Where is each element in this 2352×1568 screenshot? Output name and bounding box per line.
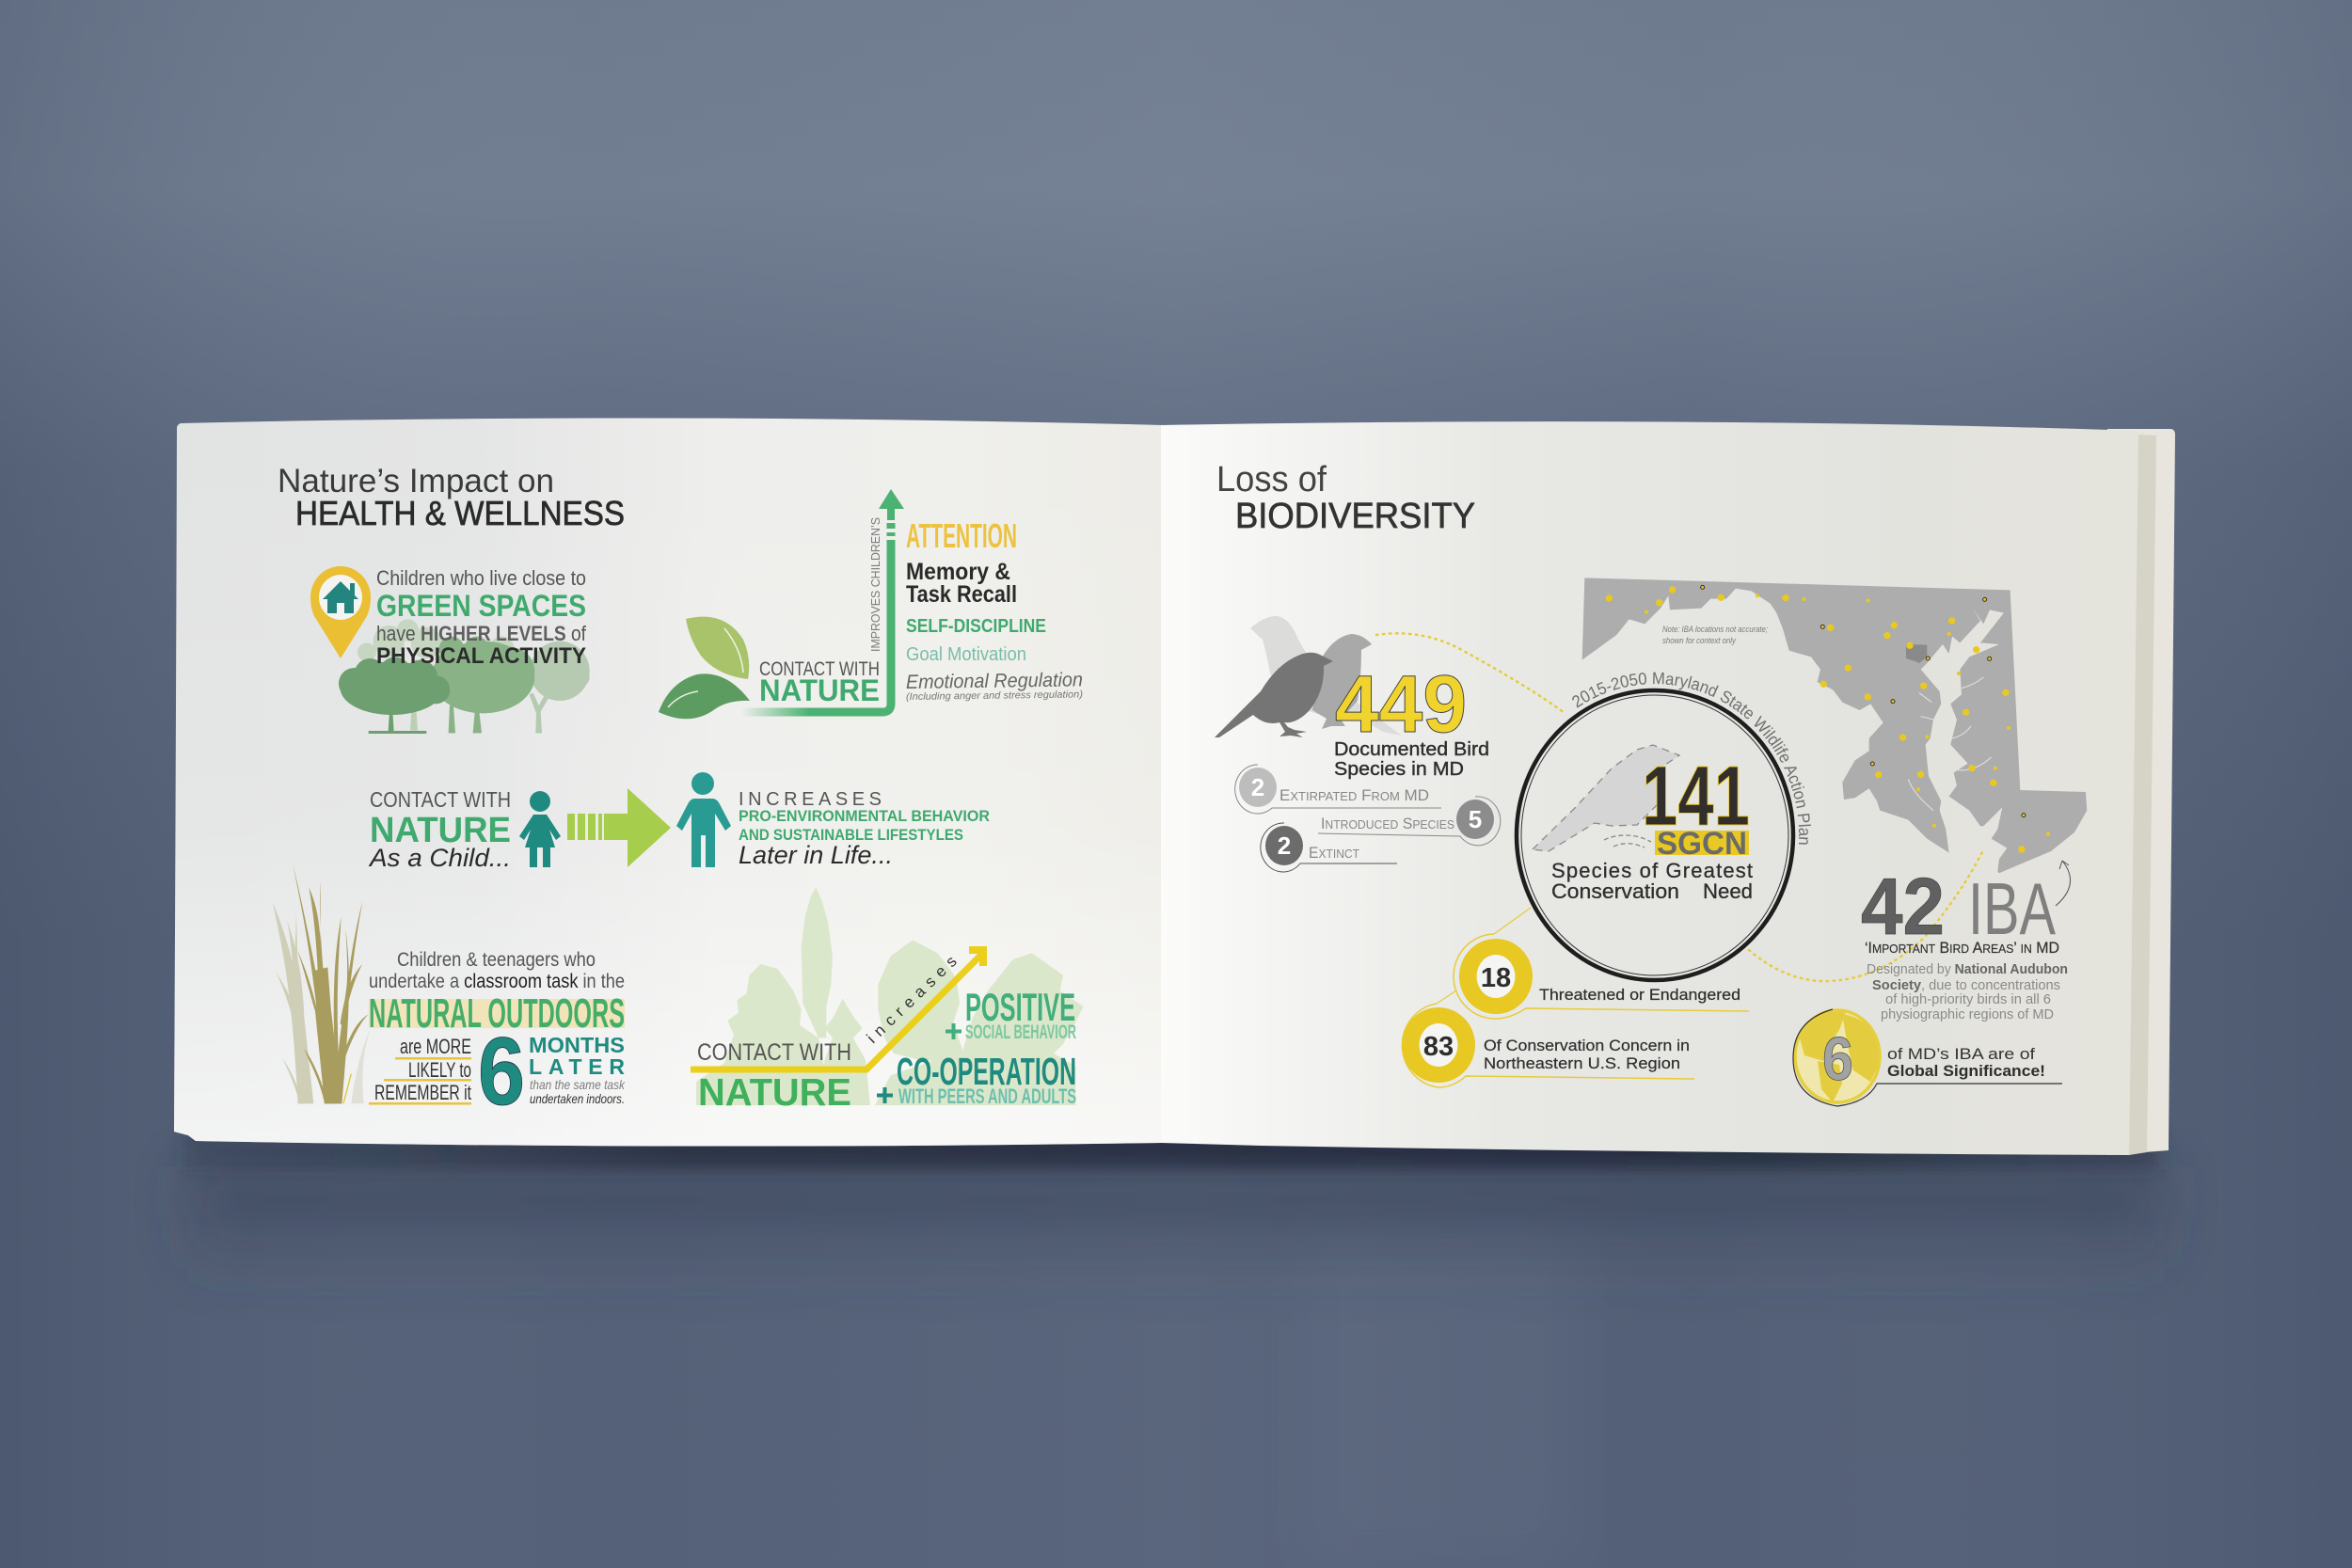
- page stack on the right edge: [2107, 429, 2175, 1155]
- stat: 2 extirpated from MD: EXTIRPATED FROM MD: [1279, 786, 1429, 804]
- stat: 6 of global significance: of MD’s IBA are of: [1887, 1045, 2035, 1063]
- block: green spaces and physical activity: [310, 566, 590, 734]
- block: contact with nature improves attention: [659, 489, 1083, 719]
- text: species of greatest conservation need: Conservation: [1551, 879, 1679, 903]
- icon: dashed bird: [1533, 745, 1679, 851]
- text: green spaces: PHYSICAL ACTIVITY: [376, 643, 586, 669]
- text: contact with nature as a child: NATURE: [370, 811, 511, 850]
- list: improved abilities: ATTENTION: [906, 516, 1017, 555]
- title: Loss of Biodiversity: Loss of: [1216, 460, 1327, 499]
- back sheet, bottom left: [174, 1082, 245, 1141]
- number: 449 documented bird species: 449: [1335, 659, 1467, 750]
- text: more likely to remember: LIKELY to: [408, 1058, 471, 1082]
- map note: [1662, 625, 1768, 645]
- stat: 42 important bird areas: ‘IMPORTANT BIRD AREAS’ IN MD: [1865, 939, 2059, 957]
- text: later in life: PRO-ENVIRONMENTAL BEHAVIOR: [739, 807, 990, 825]
- text: contact with nature: CONTACT WITH: [697, 1039, 851, 1066]
- icon: pale tree backdrop: [696, 887, 1084, 1105]
- text: classroom task: [369, 949, 625, 992]
- title: Nature's Impact on Health & Wellness: [278, 463, 625, 532]
- stat: 5 introduced species: INTRODUCED SPECIES: [1321, 815, 1454, 832]
- stat: 42 important bird areas: IBA: [1968, 867, 2056, 950]
- text: more likely to remember: are MORE: [400, 1035, 471, 1058]
- text: contact with nature: [759, 658, 880, 707]
- dotted connector from birds to circle: [1376, 633, 1565, 713]
- number: 6 months later: LATER: [529, 1054, 625, 1079]
- text: later in life: INCREASES: [739, 789, 882, 810]
- stat: 42 important bird areas: [1861, 861, 2071, 1022]
- text: green spaces: GREEN SPACES: [376, 589, 586, 623]
- left page lower highlight: [174, 418, 1163, 1147]
- stat: 18 threatened or endangered: [1454, 934, 1749, 1019]
- map note: shown for context only: [1662, 636, 1736, 645]
- list: improved abilities: Memory &: [906, 559, 1010, 585]
- circle rings: [1517, 690, 1793, 980]
- number: 6 months later: [478, 1018, 626, 1125]
- text: contact with nature: CONTACT WITH: [759, 658, 880, 680]
- number: 449 documented bird species: Documented Bird: [1334, 739, 1489, 760]
- text: later in life: Later in Life...: [739, 841, 893, 869]
- stat: 83 of conservation concern: [1402, 1004, 1694, 1087]
- arrow: striped green arrow: [567, 788, 671, 867]
- Baltimore county: [1906, 644, 1927, 663]
- text: contact with nature as a child: [368, 787, 511, 872]
- text: green spaces: have HIGHER LEVELS of: [376, 622, 587, 645]
- stat: 2 extirpated from MD: 2: [1251, 773, 1264, 801]
- stat: 6 of global significance: Global Significance!: [1887, 1062, 2045, 1080]
- dotted connector from circle to IBA: [1749, 848, 1984, 981]
- label: increases along arrow: increases: [864, 952, 961, 1047]
- curved label: action plan: 2015-2050 Maryland State Wildlife Action Plan: [1572, 672, 1811, 845]
- stat: 6 of global significance: 6: [1822, 1024, 1853, 1093]
- stat: 2 extinct: 2: [1278, 832, 1291, 860]
- highlight: natural outdoors: NATURAL OUTDOORS: [369, 990, 625, 1037]
- icon: adult: [676, 772, 731, 867]
- icon: globe: [1793, 1009, 2062, 1106]
- list: improved abilities: (Including anger and stress regulation): [906, 689, 1083, 703]
- text: more likely to remember: [369, 1035, 471, 1104]
- block: classroom task in natural outdoors: [273, 865, 626, 1125]
- text: co-operation with peers: CO-OPERATION: [897, 1050, 1076, 1093]
- panel: right page: [1161, 421, 2138, 1155]
- map note: Note: IBA locations not accurate;: [1662, 625, 1768, 634]
- block: contact as a child increases later behavior: [368, 772, 990, 872]
- text: co-operation with peers: [877, 1050, 1076, 1108]
- stat: 42 important bird areas: of high-priority birds in all 6: [1885, 991, 2051, 1007]
- stat: 42 important bird areas: Designated by National Audubon: [1867, 961, 2068, 977]
- list: improved abilities: Emotional Regulation: [906, 669, 1083, 693]
- text: species of greatest conservation need: Need: [1703, 879, 1753, 903]
- badge: SGCN: SGCN: [1657, 826, 1747, 862]
- text: contact with nature as a child: CONTACT WITH: [370, 787, 511, 812]
- text: contact with nature as a child: As a Child...: [368, 844, 511, 872]
- title: Loss of Biodiversity: [1216, 460, 1475, 536]
- stat: 42 important bird areas: Society, due to concentrations: [1872, 977, 2060, 993]
- text: later in life: [739, 789, 990, 869]
- text: co-operation with peers: WITH PEERS AND ADULTS: [898, 1085, 1076, 1108]
- block: contact with nature increases social behavior: [691, 887, 1084, 1114]
- number: 6 months later: 6: [478, 1018, 525, 1125]
- highlight: natural outdoors: [369, 990, 625, 1037]
- text: green spaces: [376, 566, 587, 669]
- text: more likely to remember: REMEMBER it: [374, 1081, 471, 1104]
- panel: Nature's Impact on Health & Wellness: [273, 463, 1084, 1125]
- text: species of greatest conservation need: Species of Greatest: [1551, 859, 1753, 882]
- stat: 18 threatened or endangered: Threatened or Endangered: [1539, 986, 1740, 1004]
- stat: 18 threatened or endangered: 18: [1481, 963, 1511, 993]
- map: Maryland with Important Bird Areas: [1582, 578, 2087, 873]
- stat: 5 introduced species: [1318, 797, 1501, 846]
- panel: left page: [174, 418, 1163, 1147]
- stat: 83 of conservation concern: Of Conservation Concern in: [1484, 1037, 1690, 1054]
- stat: 42 important bird areas: 42: [1861, 863, 1945, 952]
- text: later in life: AND SUSTAINABLE LIFESTYLES: [739, 826, 963, 844]
- arrow: thin curved pointer to map: [2056, 861, 2071, 906]
- map dots: [1606, 585, 2050, 853]
- thin yellow connector lines: [1437, 908, 1531, 1004]
- icon: leaves: [659, 617, 750, 719]
- panel: Loss of Biodiversity: [1215, 460, 2087, 1107]
- stat: 6 of global significance: [1793, 1009, 2062, 1106]
- stat: 5 introduced species: 5: [1469, 805, 1482, 833]
- text: classroom task: undertake a classroom task in the: [369, 971, 625, 992]
- arrow: L-shaped green arrow: [741, 489, 904, 712]
- icon: three bird silhouettes: [1215, 616, 1402, 737]
- number: 449 documented bird species: [1334, 659, 1489, 780]
- stat: 83 of conservation concern: Northeastern U.S. Region: [1484, 1054, 1680, 1072]
- title: Nature's Impact on Health & Wellness: HEALTH & WELLNESS: [295, 494, 625, 532]
- list: improved abilities: [906, 516, 1083, 703]
- number: 141: 141: [1642, 750, 1750, 844]
- text: contact with nature: [697, 1039, 851, 1114]
- text: contact with nature: NATURE: [759, 673, 880, 707]
- list: improved abilities: Task Recall: [906, 581, 1017, 608]
- title: Nature's Impact on Health & Wellness: Nature’s Impact on: [278, 463, 554, 499]
- arrow: rising yellow arrow: [691, 946, 987, 1069]
- text: positive social behavior: [946, 985, 1076, 1043]
- number: 6 months later: than the same task: [530, 1077, 626, 1092]
- title: Loss of Biodiversity: BIODIVERSITY: [1235, 497, 1475, 536]
- text: positive social behavior: POSITIVE: [965, 985, 1075, 1029]
- list: improved abilities: Goal Motivation: [906, 644, 1026, 665]
- label: improves children's: IMPROVES CHILDREN’S: [868, 517, 882, 652]
- stat: 83 of conservation concern: 83: [1423, 1032, 1454, 1062]
- icon: tree cluster: [339, 619, 590, 734]
- number: 6 months later: undertaken indoors.: [530, 1091, 625, 1106]
- main circle: 141 SGCN: [1515, 672, 1811, 982]
- icon: tall grass: [273, 865, 370, 1103]
- stat: 2 extinct: EXTINCT: [1309, 844, 1359, 862]
- text: green spaces: Children who live close to: [376, 566, 586, 590]
- number: 6 months later: MONTHS: [529, 1033, 625, 1057]
- icon: child: [519, 791, 561, 867]
- stat: 2 extinct: [1261, 823, 1397, 872]
- open brochure: [174, 418, 2175, 1155]
- text: contact with nature: NATURE: [698, 1070, 851, 1114]
- list: improved abilities: SELF-DISCIPLINE: [906, 616, 1046, 637]
- rivers and inlets: [1908, 677, 1992, 811]
- stat: 2 extirpated from MD: [1235, 765, 1441, 814]
- number: 449 documented bird species: Species in MD: [1334, 759, 1464, 780]
- text: classroom task: Children & teenagers who: [397, 949, 596, 971]
- text: positive social behavior: SOCIAL BEHAVIOR: [965, 1022, 1076, 1043]
- text: species of greatest conservation need: [1551, 859, 1753, 903]
- stat: 42 important bird areas: physiographic regions of MD: [1881, 1006, 2054, 1022]
- icon: location pin with house: [310, 566, 371, 658]
